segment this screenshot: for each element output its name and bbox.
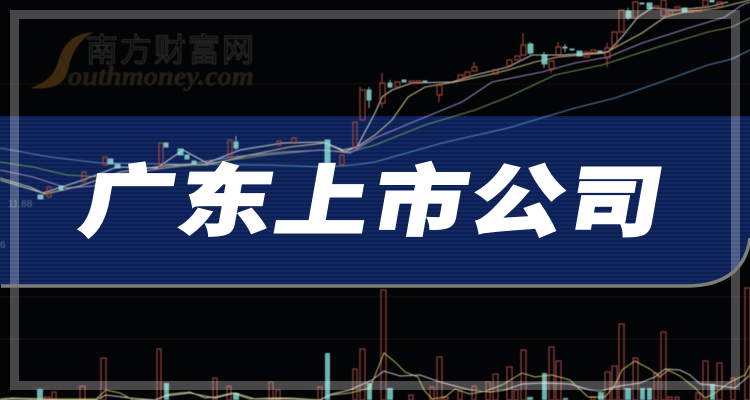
chart: volume average lines — [0, 353, 750, 400]
chart: moving average lines — [0, 0, 750, 194]
chart: volume bars red — [44, 288, 750, 400]
watermark Chinese name: 南方财富网 — [86, 32, 256, 68]
chart: faint grid lines — [0, 84, 750, 339]
icon: brown S swoosh — [30, 32, 94, 88]
chart: red candlesticks — [47, 0, 722, 197]
panel: title band — [0, 116, 750, 286]
watermark URL: outhmoney.com — [68, 61, 254, 91]
chart: cyan candlesticks — [38, 0, 714, 199]
price labels on chart — [0, 199, 33, 251]
chart: volume bars cyan — [37, 353, 715, 400]
title: 广东上市公司 — [74, 160, 674, 246]
watermark logo: Southmoney — [30, 32, 256, 91]
price labels on chart: 11.88 — [8, 199, 33, 210]
panel border — [1, 238, 750, 286]
price labels on chart: 6 — [0, 240, 6, 251]
